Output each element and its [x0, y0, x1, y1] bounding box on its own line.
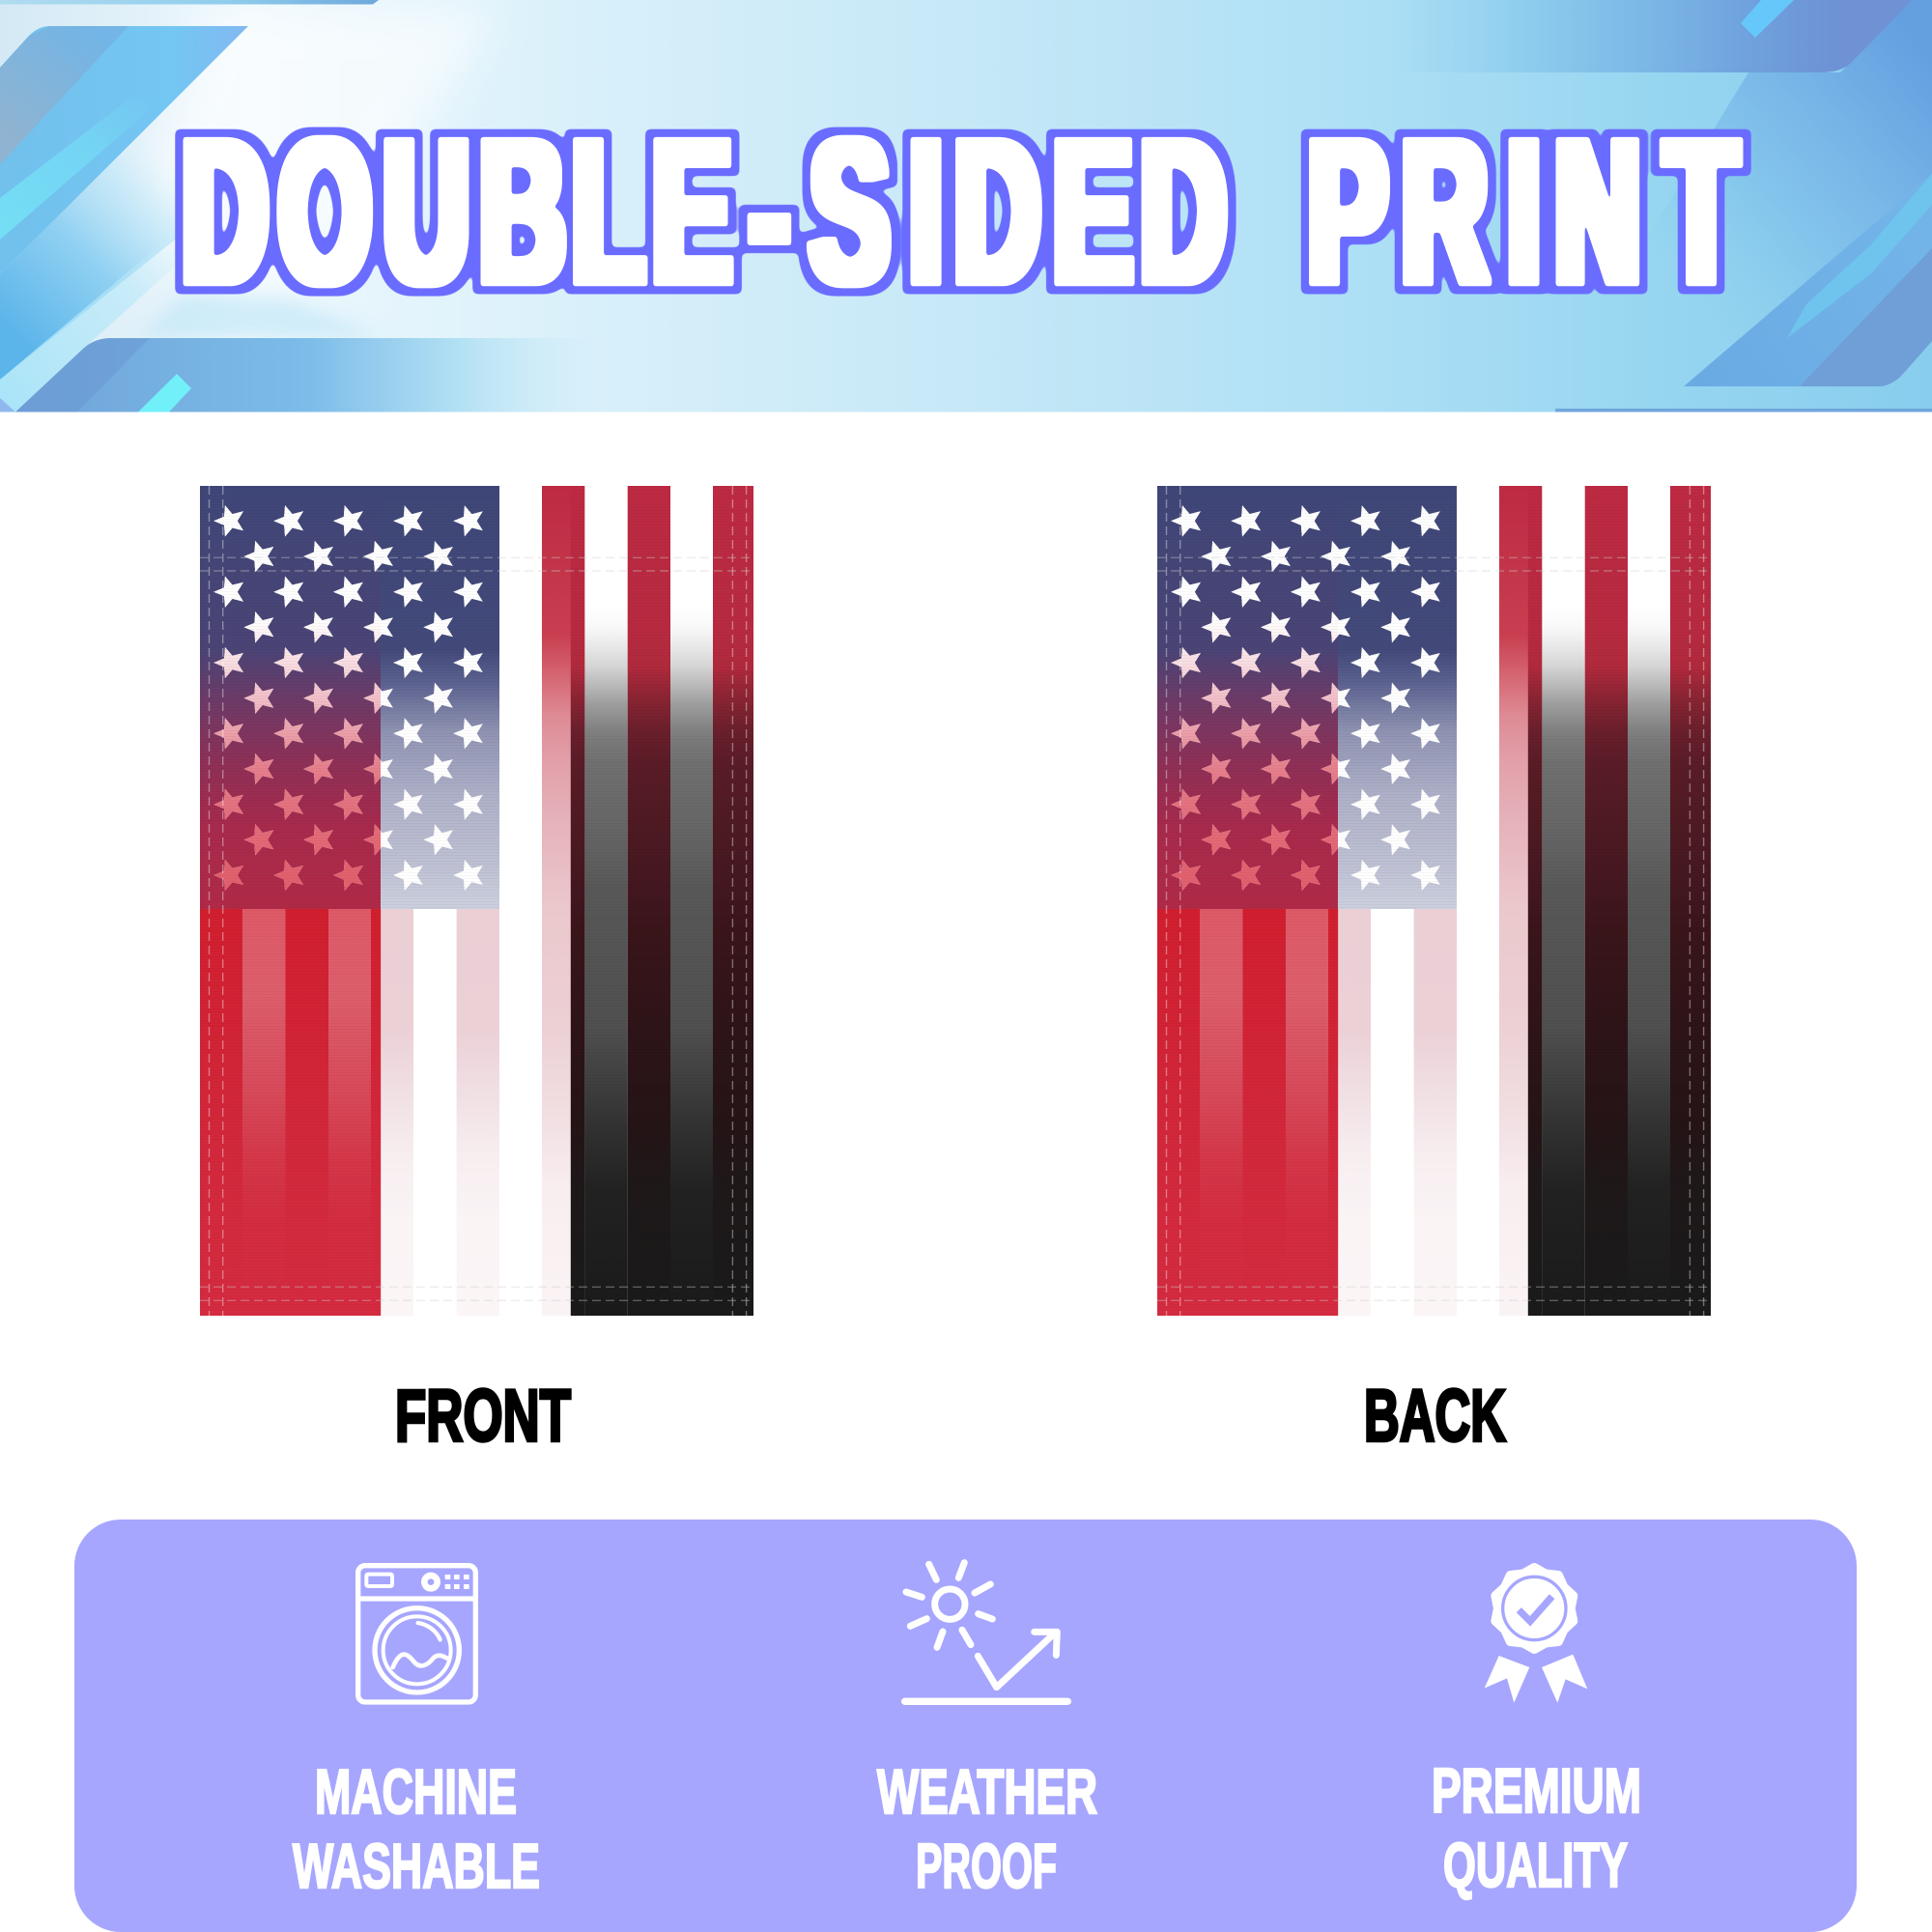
header right lower panel [1684, 174, 1932, 386]
header cyan accent right [1741, 0, 1794, 38]
back label: BACK [1364, 1376, 1506, 1457]
header left lower diagonal band [0, 110, 203, 380]
icon: washing machine [358, 1566, 475, 1702]
stitching [200, 486, 753, 1316]
header left bright stripe [0, 87, 159, 240]
icon: sun and weather arrow [905, 1563, 1067, 1701]
header right dark corner [1800, 248, 1932, 386]
label: premium quality: PREMIUM [1432, 1755, 1641, 1826]
front flag [200, 486, 753, 1316]
label: weather proof [877, 1756, 1097, 1901]
fabric weave texture [200, 486, 753, 1316]
header pale facet [135, 295, 386, 338]
header banner [0, 0, 1932, 412]
header right diagonal lighter region [1604, 0, 1932, 386]
front label: FRONT [395, 1376, 571, 1457]
header bottom-right strip [1555, 409, 1932, 412]
icon: quality badge [1485, 1568, 1587, 1703]
header cyan accent left [138, 374, 191, 412]
canton right half [381, 486, 499, 909]
header lower-left band [15, 338, 618, 412]
header left dark facet [0, 26, 128, 164]
tinted stars over red half [200, 486, 381, 909]
label: premium quality: QUALITY [1443, 1830, 1628, 1900]
features panel [74, 1520, 1857, 1932]
header left pale stripe [0, 225, 203, 412]
label: machine washable: MACHINE [315, 1756, 517, 1827]
header left bright glow [126, 8, 502, 290]
back flag [1157, 486, 1711, 1316]
header top-right band [1391, 0, 1913, 72]
header top-left strip [0, 0, 379, 4]
label: machine washable [293, 1756, 540, 1901]
label: premium quality [1432, 1755, 1641, 1900]
lower left red stripes [200, 909, 381, 1316]
header lilac corner [0, 398, 15, 412]
label: weather proof: WEATHER [877, 1756, 1097, 1827]
label: weather proof: PROOF [916, 1831, 1057, 1901]
star field [213, 505, 483, 891]
label: machine washable: WASHABLE [293, 1831, 540, 1901]
header left parallelogram [0, 26, 248, 274]
lower pale stripes [381, 909, 499, 1316]
long fading stripes [542, 486, 753, 1316]
header lower-left dark facet [15, 338, 150, 412]
header right bright stripe [1787, 174, 1932, 338]
canton left half [200, 486, 381, 909]
title: DOUBLE-SIDED PRINT [182, 97, 1738, 326]
